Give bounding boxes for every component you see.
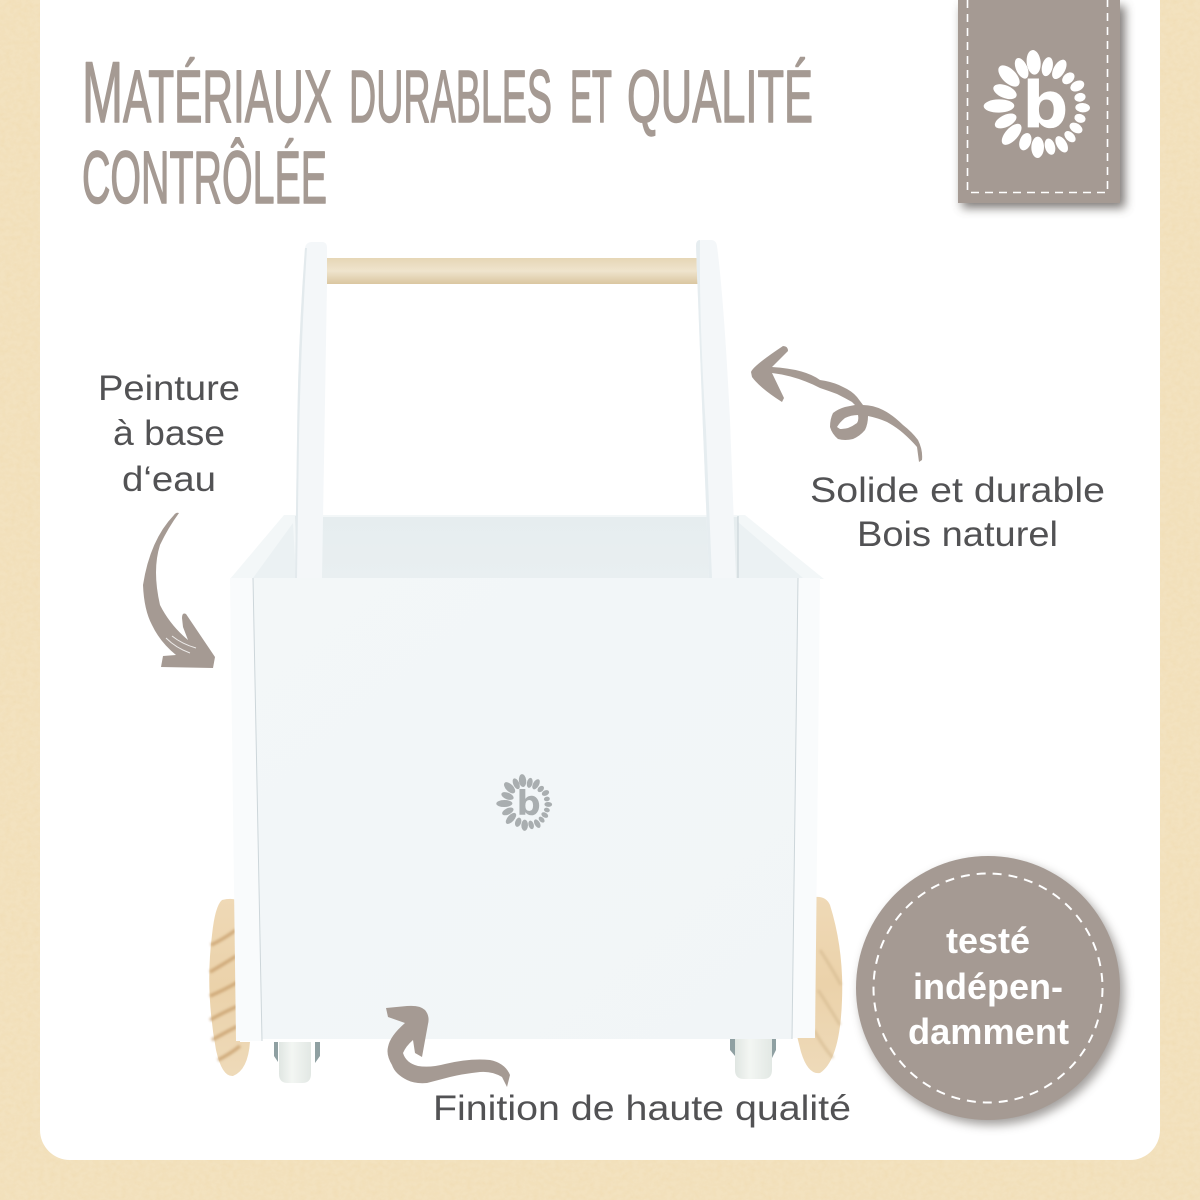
left handle upright	[295, 242, 327, 578]
right caster	[730, 1036, 776, 1079]
arrow: finish label to box	[386, 1006, 510, 1087]
label: water-based paint: d‘eau	[122, 460, 216, 499]
badge: independently tested	[856, 856, 1124, 1125]
label: water-based paint: à base	[113, 414, 225, 453]
badge: independently tested: damment	[908, 1011, 1069, 1052]
left wooden wheel	[209, 899, 250, 1076]
label: solid and durable	[810, 471, 1105, 554]
title: DURABLES	[349, 55, 552, 138]
label: solid and durable: Bois naturel	[857, 515, 1058, 554]
icon: brand logo	[984, 49, 1090, 158]
box interior side walls	[253, 522, 803, 578]
box interior back wall	[296, 517, 738, 578]
title: CONTRÔLÉE	[82, 136, 327, 219]
icon: brand logo: b	[1022, 70, 1068, 144]
box front panel	[253, 578, 798, 1039]
left caster	[274, 1042, 320, 1083]
icon: small logo on box: b	[517, 784, 541, 823]
title: MATÉRIAUX	[82, 45, 332, 141]
arrow: durable label to handle	[751, 346, 922, 462]
product: wooden push cart	[209, 240, 842, 1083]
title: ET	[570, 55, 612, 138]
box left edge	[230, 578, 262, 1041]
label: solid and durable: Solide et durable	[810, 471, 1105, 510]
title: QUALITÉ	[627, 55, 813, 138]
label: water-based paint: Peinture	[98, 369, 240, 408]
box right edge	[792, 578, 820, 1038]
badge: independently tested: testé	[946, 920, 1030, 961]
title	[82, 45, 813, 219]
brand tag	[958, 0, 1125, 208]
label: high quality finish: Finition de haute qualité	[433, 1089, 851, 1128]
arrow: paint label to box	[143, 513, 215, 668]
icon: small logo on box	[496, 774, 552, 831]
right wooden wheel	[797, 897, 842, 1073]
handle bar	[325, 258, 698, 284]
right handle upright	[696, 240, 736, 578]
label: water-based paint	[98, 369, 240, 499]
badge: independently tested: indépen-	[913, 966, 1063, 1007]
box top rim	[230, 515, 824, 579]
